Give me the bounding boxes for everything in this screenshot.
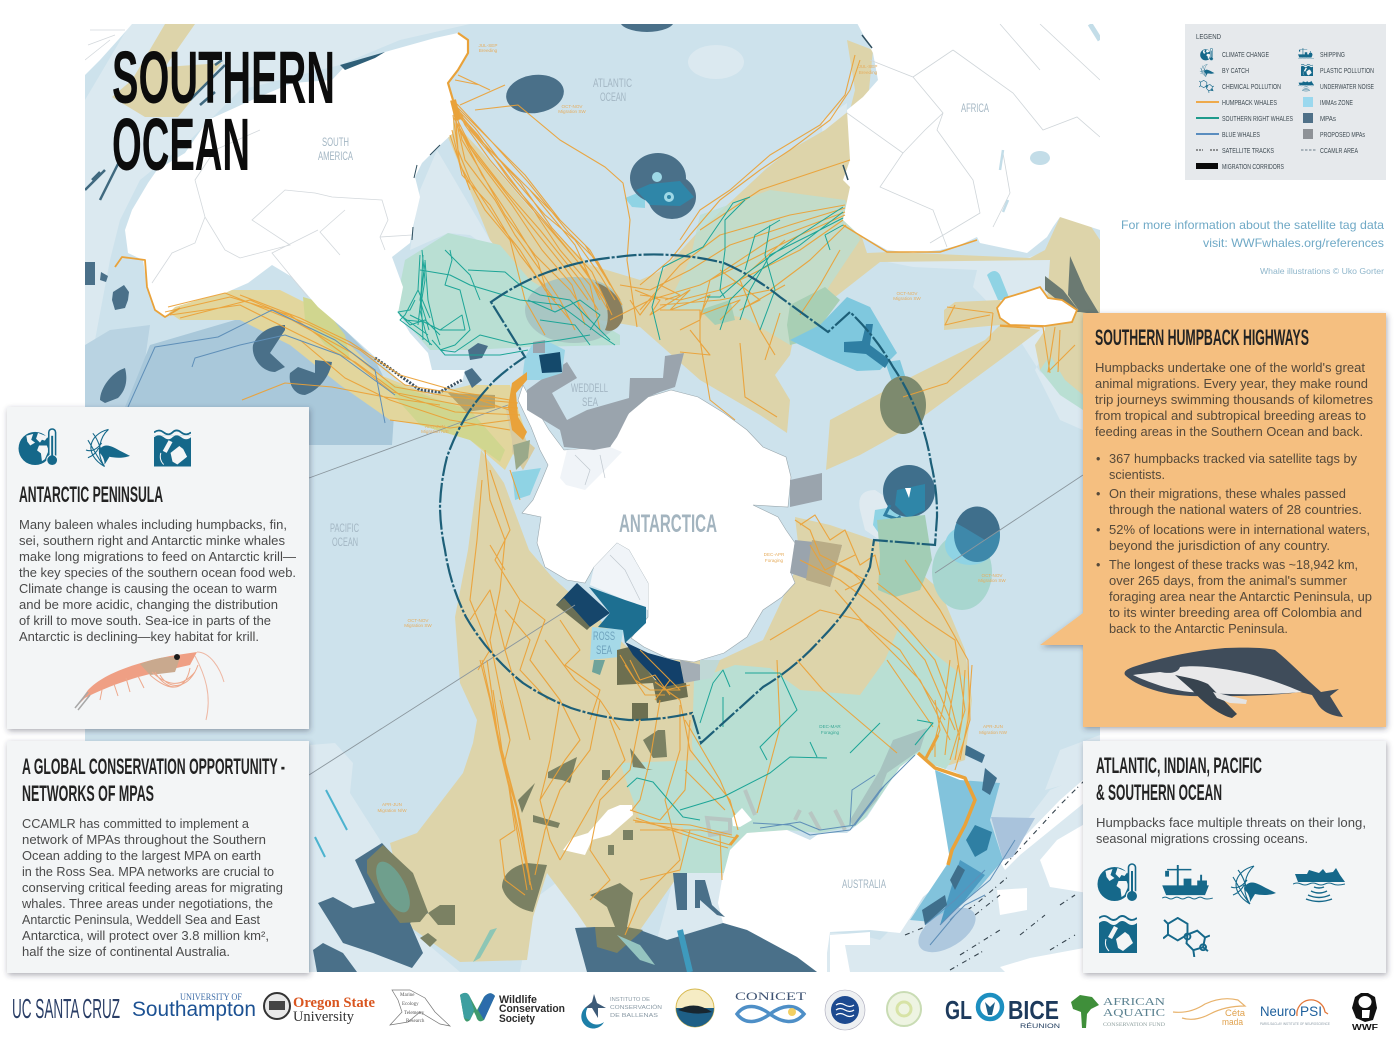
legend: icons: [1199, 48, 1314, 93]
body text: make long migrations to feed on Antarctic krill—: [19, 550, 296, 564]
legend: labels: IMMAs ZONE: [1320, 98, 1353, 107]
logo: african aquatic conservation fund: AQUATIC: [1103, 1007, 1165, 1019]
logo: wildlife conservation society: Wildlife: [499, 994, 537, 1006]
satellite tag note: visit: WWFwhales.org/references: [1203, 236, 1384, 250]
body text: network of MPAs throughout the Southern: [22, 833, 266, 847]
body text: [19, 518, 296, 644]
logo: instituto de conservacion de ballenas: INSTITUTO DE: [610, 997, 651, 1003]
legend: labels: CCAMLR AREA: [1320, 146, 1359, 155]
southern right whale tracks: [398, 197, 933, 820]
logo: cetamada: mada: [1222, 1017, 1243, 1027]
logo: neuro psi: Neuro: [1260, 1003, 1296, 1019]
seamount MPAs atlantic: [625, 153, 696, 219]
body text: whales. Three areas under negotiations, the: [21, 897, 273, 911]
logo: conicet: CONICET: [735, 989, 807, 1003]
body text: Humpbacks face multiple threats on their long,: [1096, 816, 1366, 830]
new zealand: [563, 805, 633, 855]
legend: [1185, 24, 1386, 180]
legend: LEGEND: [1196, 32, 1221, 41]
olive overlap pacific: [367, 845, 643, 953]
seasonal migration labels: Migration N/W: [377, 808, 407, 813]
legend: labels: MPAs: [1320, 114, 1336, 123]
logo: conicet: [735, 989, 807, 1022]
seasonal migration labels: APR-JUN: [425, 424, 445, 429]
logo: wildlife conservation society: Conservation: [499, 1003, 565, 1015]
panel: global conservation opportunity: [7, 741, 309, 973]
satellite tag note: [1121, 218, 1384, 276]
body text: half the size of continental Australia.: [22, 945, 230, 959]
icon: climate change: [1098, 864, 1138, 902]
legend: labels: SHIPPING: [1320, 50, 1345, 59]
title: SOUTHERN: [112, 36, 335, 119]
africa: [843, 23, 1100, 253]
seasonal migration labels: Migration SW: [893, 296, 921, 301]
seasonal migration labels: [377, 43, 1008, 813]
ccamlr boundary: [440, 254, 937, 743]
heading: ATLANTIC, INDIAN, PACIFIC: [1096, 753, 1262, 778]
legend: labels: HUMPBACK WHALES: [1222, 98, 1277, 107]
blue whale tracks: [128, 310, 1015, 925]
proposed MPA weddell sea: [527, 353, 684, 450]
seasonal migration labels: Migration SW: [404, 623, 432, 628]
east australia blue zone: [910, 745, 1035, 961]
body text: of krill to move south. Sea-ice in parts of the: [19, 614, 271, 628]
seasonal migration labels: DEC-MAR: [819, 724, 841, 729]
leader lines: [309, 405, 1083, 775]
pacific islands: [830, 780, 1083, 972]
seasonal migration labels: OCT-NOV: [897, 291, 918, 296]
humpback tracks: [165, 55, 1075, 935]
logo: african aquatic conservation fund: AFRICAN: [1103, 996, 1165, 1008]
bullet list: The longest of these tracks was ~18,942 km,: [1109, 558, 1358, 572]
seasonal migration labels: Foraging: [765, 558, 784, 563]
bullet list: •: [1096, 487, 1100, 501]
map labels: SOUTH: [322, 135, 349, 149]
green overlap near africa: [787, 287, 840, 345]
south pacific to peninsula corridor: [165, 290, 525, 470]
legend: labels: SOUTHERN RIGHT WHALES: [1222, 114, 1293, 123]
body text: seasonal migrations crossing oceans.: [1096, 832, 1308, 846]
intro text: feeding areas in the Southern Ocean and back.: [1095, 425, 1363, 439]
logo: oregon state: [264, 993, 375, 1025]
humpback corridors: [112, 24, 1100, 962]
legend: labels: BY CATCH: [1222, 66, 1249, 75]
thick coastal tracks: [115, 33, 1030, 865]
legend: labels: SATELLITE TRACKS: [1222, 146, 1274, 155]
antarctica: [518, 385, 795, 662]
madagascar: [997, 287, 1077, 326]
logo: wildlife conservation society: Society: [499, 1013, 536, 1025]
bullet list: beyond the jurisdiction of any country.: [1109, 539, 1330, 553]
logo: marine ecology and telemetry research: [390, 990, 450, 1026]
illustration: humpback whale: [1125, 648, 1343, 718]
logo: cetamada: Céta: [1225, 1008, 1245, 1018]
map: [85, 10, 1100, 972]
bullet list: back to the Antarctic Peninsula.: [1109, 622, 1288, 636]
indian ocean MPAs: [859, 465, 935, 597]
heading: [22, 754, 285, 806]
bullet list: scientists.: [1109, 468, 1165, 482]
bullet list: •: [1096, 452, 1100, 466]
body text: CCAMLR has committed to implement a: [22, 817, 249, 831]
body text: Many baleen whales including humpbacks, fin,: [19, 518, 287, 532]
intro text: animal migrations. Every year, they make round: [1095, 377, 1368, 391]
panel: southern humpback highways: [1040, 313, 1386, 727]
logo: southampton: UNIVERSITY OF: [180, 992, 242, 1002]
body text: Antarctic is declining—key habitat for krill.: [19, 630, 259, 644]
proposed MPA east antarctica: [790, 473, 822, 507]
bullet list: to its winter breeding area off Colombia and: [1109, 606, 1362, 620]
body text: [1096, 816, 1366, 846]
logo: cetamada: [1173, 999, 1245, 1027]
intro text: [1095, 361, 1373, 439]
MPA ellipse top: [506, 74, 564, 114]
south pacific MPAs: [420, 730, 667, 947]
body text: in the Ross Sea. MPA networks are crucial to: [22, 865, 274, 879]
map labels: OCEAN: [600, 90, 626, 104]
partner logos: [12, 989, 1378, 1032]
logo: globice: RÉUNION: [1020, 1023, 1060, 1030]
logo: marine ecology and telemetry research: Telemetry: [404, 1011, 425, 1016]
south america borders: [85, 30, 412, 297]
map labels: PACIFIC: [330, 521, 359, 535]
blue whale migration zone: [125, 320, 394, 445]
logo: neuro psi: [1260, 1000, 1331, 1026]
map labels: ROSS: [593, 629, 615, 643]
body text: Antarctica, will protect over 3.8 million km²,: [22, 929, 269, 943]
body text: Antarctic Peninsula, Weddell Sea and East: [22, 913, 260, 927]
legend: labels: PLASTIC POLLUTION: [1320, 66, 1374, 75]
title: OCEAN: [112, 103, 250, 186]
seasonal migration labels: Breeding: [479, 48, 498, 53]
logo: globice: GL: [945, 995, 972, 1025]
east africa MPAs: [1045, 256, 1100, 315]
australia: [718, 753, 978, 972]
seasonal migration labels: OCT-NOV: [982, 573, 1003, 578]
icon: shipping: [1162, 865, 1213, 899]
map labels: [318, 76, 989, 891]
IMMA east of africa: [790, 297, 897, 371]
body text: [21, 817, 283, 959]
heading: ANTARCTIC PENINSULA: [19, 482, 163, 507]
body text: and be more acidic, changing the distribution: [19, 598, 278, 612]
map labels: AFRICA: [961, 101, 989, 115]
seasonal migration labels: APR-JUN: [382, 802, 402, 807]
satellite tag note: Whale illustrations © Uko Gorter: [1260, 266, 1384, 276]
body text: the key species of the southern ocean food web.: [19, 566, 296, 580]
olive ellipse mid indian: [880, 376, 926, 434]
logo: oregon state: Oregon State: [293, 995, 375, 1011]
icon: plastic pollution: [1099, 916, 1137, 953]
legend: labels: CHEMICAL POLLUTION: [1222, 82, 1281, 91]
pale atlantic ellipse: [688, 45, 744, 79]
heading: & SOUTHERN OCEAN: [1096, 780, 1222, 805]
logo: neuro psi: PSI: [1300, 1003, 1322, 1019]
panel: multiple threats: [1083, 741, 1386, 973]
map labels: ATLANTIC: [593, 76, 632, 90]
logo: african aquatic conservation fund: CONSERVATION FUND: [1103, 1023, 1165, 1028]
seasonal migration labels: OCT-NOV: [562, 104, 583, 109]
body text: sei, southern right and Antarctic minke whales: [19, 534, 285, 548]
logo: blue water emblem: [825, 990, 865, 1030]
icon: underwater noise: [1293, 868, 1345, 902]
seasonal migration labels: Foraging: [821, 730, 840, 735]
map labels: AUSTRALIA: [842, 877, 886, 891]
title: [112, 36, 335, 186]
legend: labels: MIGRATION CORRIDORS: [1222, 162, 1284, 171]
peninsula MPAs: [505, 340, 565, 500]
seasonal migration labels: OCT-NOV: [408, 618, 429, 623]
seasonal migration labels: Migration NW: [979, 730, 1008, 735]
small south america MPAs: [85, 262, 488, 403]
partner logos: UC SANTA CRUZ: [12, 993, 120, 1024]
bullet list: 367 humpbacks tracked via satellite tags by: [1109, 452, 1358, 466]
map labels: ANTARCTICA: [619, 510, 717, 538]
bullet list: On their migrations, these whales passed: [1109, 487, 1346, 501]
panel: antarctic peninsula: [7, 407, 309, 729]
heading: A GLOBAL CONSERVATION OPPORTUNITY -: [22, 754, 285, 779]
right whale zones: [395, 190, 1083, 873]
logo: instituto de conservacion de ballenas: DE BALLENAS: [610, 1013, 659, 1019]
bullet list: over 265 days, from the animal's summer: [1109, 574, 1347, 588]
logo: instituto de conservacion de ballenas: CONSERVACIÓN: [610, 1004, 662, 1011]
body text: conserving critical feeding areas for migrating: [22, 881, 283, 895]
pale coastal waters: [85, 24, 1100, 972]
body text: Climate change is causing the ocean to warm: [19, 582, 277, 596]
legend: labels: PROPOSED MPAs: [1320, 130, 1365, 139]
icon: by catch: [1231, 866, 1276, 904]
seasonal migration labels: Migration N/E: [421, 429, 449, 434]
body text: Ocean adding to the largest MPA on earth: [22, 849, 261, 863]
logo: marine ecology and telemetry research: Marine: [400, 993, 415, 998]
map labels: WEDDELL: [571, 381, 608, 395]
icon: by catch: [86, 429, 130, 467]
icon: climate change: [19, 429, 58, 466]
legend: swatches: [1196, 97, 1316, 169]
logo: globice: BICE: [1008, 995, 1059, 1025]
north east australia grey band: [850, 728, 927, 827]
south america: [125, 33, 468, 393]
logo: oregon state: University: [293, 1009, 354, 1025]
legend: labels: [1222, 50, 1374, 171]
africa borders: [847, 24, 1100, 247]
bullet list: [1096, 452, 1372, 636]
seasonal migration labels: JUL-SEP: [479, 43, 497, 48]
logo: marine ecology and telemetry research: Research: [406, 1019, 425, 1024]
illustration: krill: [75, 652, 224, 720]
pacific dark MPAs: [313, 843, 817, 972]
seasonal migration labels: APR-JUN: [983, 724, 1003, 729]
seasonal migration labels: Breeding: [859, 70, 878, 75]
icon: chemical pollution: [1163, 918, 1210, 957]
scotia sea ellipse: [525, 277, 623, 343]
ice shelves: [560, 447, 648, 610]
ross sea MPA: [556, 583, 688, 720]
bullet list: •: [1096, 558, 1100, 572]
seasonal migration labels: Migration SW: [978, 578, 1006, 583]
heading: [1096, 753, 1262, 805]
intro text: trip journeys swimming thousands of kilometres: [1095, 393, 1373, 407]
logo: globice: [945, 995, 1060, 1030]
heading: NETWORKS OF MPAS: [22, 781, 154, 806]
logo: neuro psi: PARIS-SACLAY INSTITUTE OF NEUROSCIENCE: [1260, 1022, 1331, 1026]
logo: wwf: [1352, 993, 1378, 1032]
logo: instituto aqualie: [887, 992, 921, 1026]
legend: labels: BLUE WHALES: [1222, 130, 1260, 139]
seasonal migration labels: Migration SW: [558, 109, 586, 114]
logo: african aquatic conservation fund: [1071, 995, 1165, 1028]
pacific blue whale range: [85, 325, 150, 407]
intro text: Humpbacks undertake one of the world's great: [1095, 361, 1366, 375]
bullet list: 52% of locations were in international waters,: [1109, 523, 1370, 537]
map labels: SEA: [596, 643, 612, 657]
legend: labels: CLIMATE CHANGE: [1222, 50, 1269, 59]
seasonal migration labels: JUL-SEP: [859, 64, 877, 69]
bullet list: through the national waters of 28 countries.: [1109, 503, 1362, 517]
logo: wwf: WWF: [1352, 1023, 1378, 1032]
map labels: OCEAN: [332, 535, 358, 549]
logo: wildlife conservation society: [460, 993, 565, 1025]
map labels: SEA: [582, 395, 598, 409]
MPA Y shape: [844, 324, 890, 368]
logo: circular whale emblem: [676, 989, 714, 1027]
logo: southampton: Southampton: [132, 998, 256, 1021]
bullet list: •: [1096, 523, 1100, 537]
logo: marine ecology and telemetry research: Ecology: [402, 1002, 419, 1007]
legend: labels: UNDERWATER NOISE: [1320, 82, 1374, 91]
intro text: from tropical and subtropical breeding areas to: [1095, 409, 1366, 423]
seasonal migration labels: DEC-APR: [764, 552, 785, 557]
logo: instituto de conservacion de ballenas: [581, 994, 662, 1029]
bullet list: foraging area near the Antarctic Peninsula, up: [1109, 590, 1372, 604]
map labels: AMERICA: [318, 149, 353, 163]
satellite tag note: For more information about the satellite tag data: [1121, 218, 1384, 232]
small dark strips: [85, 60, 225, 200]
icon: plastic pollution: [154, 430, 191, 466]
